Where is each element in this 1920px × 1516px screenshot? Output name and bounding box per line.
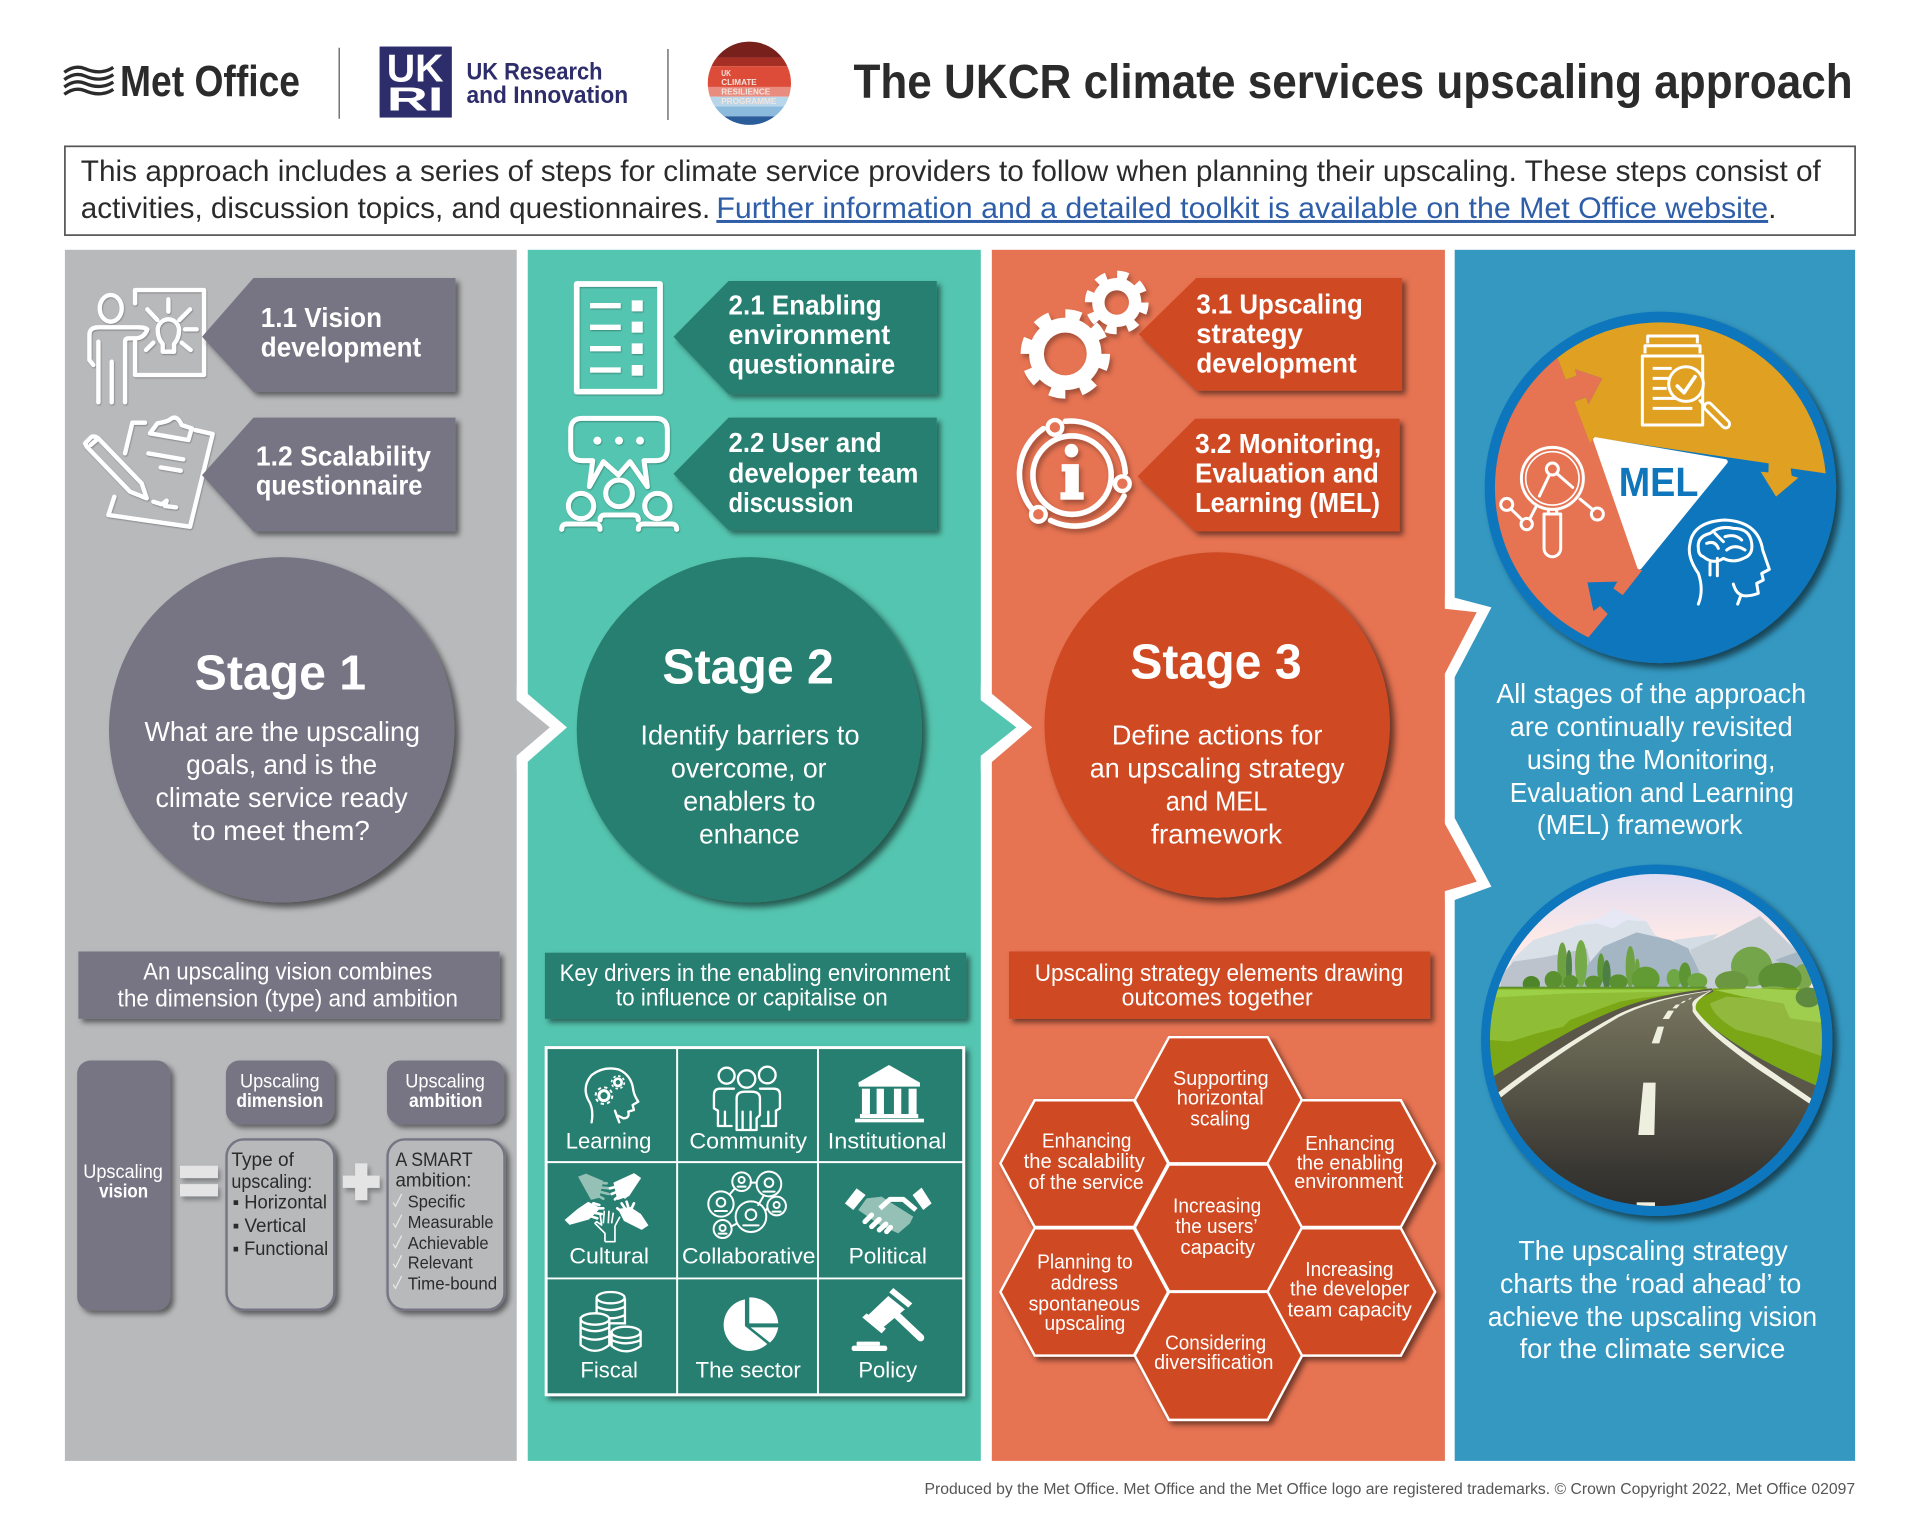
callout: 1.1: development bbox=[261, 331, 422, 362]
Stage 2 circle: enablers to bbox=[683, 786, 816, 817]
banner: strategy elements: Upscaling strategy elements drawing bbox=[1035, 960, 1403, 987]
callout: 1.2 bbox=[202, 418, 456, 531]
SMART ambition list: Measurable bbox=[408, 1212, 493, 1232]
hexagon cluster: upscaling bbox=[1044, 1313, 1125, 1335]
icon: information cycle bbox=[1019, 420, 1130, 526]
hexagon cluster: Supporting bbox=[1173, 1068, 1269, 1090]
callout: 3.1: development bbox=[1196, 347, 1357, 378]
icon: presenter with lightbulb bbox=[89, 290, 204, 402]
header: Met Office logo: Met Office bbox=[120, 58, 300, 106]
hexagon cluster: team capacity bbox=[1288, 1299, 1413, 1321]
label: Learning: Learning bbox=[566, 1129, 651, 1154]
Stage 3 circle: and MEL bbox=[1166, 786, 1267, 817]
SMART ambition list: Specific bbox=[408, 1191, 466, 1211]
MEL description text: using the Monitoring, bbox=[1527, 744, 1776, 775]
MEL description text: Evaluation and Learning bbox=[1510, 777, 1794, 808]
hexagon cluster: the enabling bbox=[1297, 1152, 1403, 1174]
header: Climate Resilience Programme logo: CLIMATE bbox=[721, 78, 757, 87]
intro text box: This approach includes a series of steps for climate service providers to follow when planning their upscaling. These steps consist of bbox=[81, 155, 1821, 188]
footer credit: Produced by the Met Office. Met Office and the Met Office logo are registered trademarks. © Crown Copyright 2022, Met Office 02097 bbox=[924, 1481, 1855, 1498]
callout: 2.1: environment bbox=[729, 319, 891, 350]
header: Climate Resilience Programme logo: RESILIENCE bbox=[721, 87, 770, 96]
Stage 2 circle bbox=[577, 557, 922, 902]
callout: 1.2: questionnaire bbox=[256, 470, 422, 501]
callout: 3.1: strategy bbox=[1196, 318, 1303, 349]
panel: Stage 3 column bbox=[992, 250, 1491, 1461]
road description text: for the climate service bbox=[1520, 1333, 1785, 1364]
callout: 2.1: 2.1 Enabling bbox=[729, 290, 882, 321]
banner: upscaling vision bbox=[78, 951, 500, 1019]
banner: strategy elements: outcomes together bbox=[1122, 984, 1313, 1011]
callout: 1.1 bbox=[202, 278, 456, 392]
callout: 3.1: 3.1 Upscaling bbox=[1196, 288, 1363, 319]
hexagon cluster: Considering bbox=[1165, 1332, 1266, 1354]
banner: key drivers: Key drivers in the enabling environment bbox=[560, 960, 951, 987]
icon: gears bbox=[1026, 275, 1144, 393]
header: UKRI logo: and Innovation bbox=[467, 82, 628, 109]
icon: document and magnifier bbox=[1642, 336, 1726, 425]
label: Policy: Policy bbox=[858, 1358, 917, 1383]
hexagon cluster: Enhancing bbox=[1042, 1130, 1131, 1152]
icon: gavel bbox=[852, 1288, 921, 1351]
upscaling dimension header: dimension bbox=[236, 1091, 323, 1112]
icon: pie chart bbox=[724, 1297, 778, 1351]
callout: 3.2: Learning (MEL) bbox=[1195, 487, 1380, 518]
drivers grid bbox=[546, 1047, 964, 1395]
hexagon cluster: capacity bbox=[1180, 1237, 1256, 1259]
hexagon cluster bbox=[1000, 1037, 1435, 1420]
hexagon cluster: of the service bbox=[1029, 1172, 1144, 1194]
upscaling vision box: vision bbox=[99, 1182, 148, 1203]
panel: MEL column bbox=[1455, 250, 1855, 1461]
icon: analysis magnifier bbox=[1501, 447, 1603, 557]
header: UKRI logo bbox=[380, 47, 628, 119]
orange MEL sector bbox=[1495, 358, 1642, 637]
title: The UKCR climate services upscaling approach bbox=[853, 56, 1853, 109]
icon: institutional bbox=[855, 1065, 924, 1122]
label: Cultural: Cultural bbox=[569, 1244, 649, 1269]
callout: 2.2: developer team bbox=[729, 457, 918, 488]
callout: 3.2: Evaluation and bbox=[1195, 457, 1379, 488]
label: Political: Political bbox=[849, 1244, 927, 1269]
icon: collaborative network bbox=[708, 1172, 786, 1238]
Stage 2 circle: enhance bbox=[699, 819, 800, 850]
road surface bbox=[1490, 988, 1827, 1210]
upscaling dimension list: upscaling: bbox=[231, 1172, 312, 1193]
icon: learning bbox=[586, 1068, 638, 1122]
upscaling dimension list: ▪ Vertical bbox=[233, 1216, 306, 1237]
callout: 3.2: 3.2 Monitoring, bbox=[1195, 428, 1381, 459]
hexagon cluster: address bbox=[1051, 1272, 1118, 1294]
header: UKRI logo: UK bbox=[387, 48, 444, 91]
upscaling ambition header: Upscaling bbox=[405, 1071, 485, 1092]
Stage 1 circle: climate service ready bbox=[156, 782, 409, 813]
MEL label: MEL bbox=[1619, 459, 1698, 505]
hexagon cluster: the scalability bbox=[1024, 1151, 1146, 1173]
hexagon cluster: the users’ bbox=[1176, 1216, 1258, 1238]
header: Met Office logo bbox=[64, 58, 300, 106]
SMART ambition list: Relevant bbox=[408, 1253, 473, 1273]
MEL cycle circle bbox=[1485, 312, 1836, 663]
callout: 1.2: 1.2 Scalability bbox=[256, 440, 431, 471]
icon: brain head bbox=[1689, 520, 1769, 604]
road description text: achieve the upscaling vision bbox=[1488, 1301, 1817, 1332]
hexagon cluster: diversification bbox=[1154, 1352, 1273, 1374]
upscaling dimension list: ▪ Functional bbox=[233, 1239, 328, 1260]
callout: 2.1 bbox=[673, 281, 937, 394]
hexagon cluster: horizontal bbox=[1177, 1088, 1264, 1110]
hexagon cluster: Increasing bbox=[1305, 1259, 1393, 1281]
MEL triangle bbox=[1596, 440, 1725, 567]
header: UKRI logo: RI bbox=[387, 82, 444, 119]
callout: 2.1: questionnaire bbox=[729, 348, 895, 379]
Stage 2 circle: Stage 2 bbox=[662, 640, 834, 694]
header: Climate Resilience Programme logo bbox=[707, 40, 792, 126]
Stage 1 circle: goals, and is the bbox=[186, 749, 377, 780]
Stage 1 circle: What are the upscaling bbox=[144, 716, 420, 747]
road lines bbox=[1498, 990, 1710, 1097]
banner: upscaling vision: the dimension (type) and ambition bbox=[118, 986, 458, 1013]
intro text box: . bbox=[1768, 192, 1777, 225]
right field layers bbox=[1695, 988, 1827, 1090]
equals sign bbox=[180, 1166, 218, 1196]
callout: 1.1: 1.1 Vision bbox=[261, 302, 382, 333]
yellow MEL sector bbox=[1557, 322, 1826, 497]
hexagon cluster: Increasing bbox=[1173, 1195, 1261, 1217]
header: Climate Resilience Programme logo: UK bbox=[721, 69, 731, 78]
label: Fiscal: Fiscal bbox=[580, 1358, 638, 1383]
banner: key drivers bbox=[545, 953, 966, 1019]
icon: clipboard and pencil bbox=[85, 418, 213, 527]
icon: questionnaire list bbox=[577, 284, 660, 392]
hexagon cluster: Enhancing bbox=[1305, 1133, 1395, 1155]
road description text: The upscaling strategy bbox=[1518, 1235, 1789, 1266]
Stage 2 circle: Identify barriers to bbox=[640, 720, 860, 751]
upscaling vision box bbox=[77, 1060, 170, 1310]
callout: 3.1 bbox=[1139, 278, 1402, 391]
intro text box: Further information and a detailed toolkit is available on the Met Office website bbox=[716, 192, 1768, 225]
upscaling dimension list: ▪ Horizontal bbox=[233, 1193, 327, 1214]
callout: 3.2 bbox=[1138, 419, 1400, 531]
label: Community: Community bbox=[689, 1129, 807, 1154]
intro text box: activities, discussion topics, and questionnaires. bbox=[81, 192, 710, 225]
header: Climate Resilience Programme logo: PROGRAMME bbox=[721, 97, 776, 106]
Stage 2 circle: overcome, or bbox=[671, 753, 827, 784]
upscaling dimension list bbox=[227, 1139, 334, 1310]
SMART ambition list: A SMART bbox=[396, 1150, 473, 1171]
intro text box bbox=[65, 146, 1855, 235]
upscaling ambition header: ambition bbox=[409, 1091, 482, 1112]
callout: 2.2: 2.2 User and bbox=[729, 427, 882, 458]
Stage 3 circle: Stage 3 bbox=[1130, 635, 1302, 689]
hexagon cluster: scaling bbox=[1190, 1108, 1250, 1130]
upscaling ambition header bbox=[387, 1060, 504, 1124]
road description text bbox=[1488, 1235, 1817, 1364]
Stage 3 circle bbox=[1044, 552, 1390, 898]
plus sign bbox=[343, 1163, 380, 1200]
hexagon cluster: Planning to bbox=[1037, 1252, 1133, 1274]
header: UKRI logo: UK Research bbox=[467, 59, 602, 86]
Stage 1 circle bbox=[109, 557, 454, 902]
SMART ambition list: Achievable bbox=[408, 1233, 489, 1253]
upscaling dimension list: Type of bbox=[231, 1150, 295, 1171]
left field layers bbox=[1487, 988, 1710, 1080]
panel: Stage 2 column bbox=[528, 250, 1032, 1461]
label: Institutional: Institutional bbox=[828, 1129, 947, 1154]
upscaling vision box: Upscaling bbox=[83, 1162, 163, 1183]
icon: cultural hands bbox=[567, 1175, 647, 1242]
road illustration bbox=[1481, 865, 1832, 1216]
SMART ambition list bbox=[388, 1139, 504, 1310]
hexagon cluster: environment bbox=[1294, 1171, 1404, 1193]
SMART ambition list: ambition: bbox=[396, 1171, 471, 1192]
hexagon cluster: the developer bbox=[1290, 1279, 1410, 1301]
SMART ambition list: Time-bound bbox=[408, 1273, 497, 1293]
label: The sector: The sector bbox=[696, 1358, 801, 1383]
banner: upscaling vision: An upscaling vision combines bbox=[143, 959, 432, 986]
Stage 3 circle: Define actions for bbox=[1112, 720, 1322, 751]
hexagon cluster: spontaneous bbox=[1029, 1293, 1140, 1315]
banner: key drivers: to influence or capitalise on bbox=[616, 984, 888, 1011]
icon: community bbox=[714, 1067, 780, 1130]
MEL description text: (MEL) framework bbox=[1537, 809, 1743, 840]
Stage 3 circle: framework bbox=[1151, 819, 1283, 850]
icon: team discussion bbox=[562, 418, 677, 529]
banner: strategy elements bbox=[1009, 951, 1430, 1019]
label: Collaborative: Collaborative bbox=[682, 1244, 816, 1269]
Stage 3 circle: an upscaling strategy bbox=[1090, 753, 1345, 784]
MEL description text: are continually revisited bbox=[1510, 711, 1793, 742]
panel: Stage 1 column bbox=[65, 250, 567, 1461]
road description text: charts the ‘road ahead’ to bbox=[1500, 1268, 1801, 1299]
callout: 2.2 bbox=[673, 418, 937, 530]
callout: 2.2: discussion bbox=[729, 487, 853, 518]
Stage 1 circle: to meet them? bbox=[192, 815, 370, 846]
icon: handshake bbox=[845, 1188, 932, 1233]
MEL description text bbox=[1496, 678, 1806, 840]
upscaling dimension header: Upscaling bbox=[240, 1071, 320, 1092]
icon: coin stacks bbox=[581, 1292, 641, 1351]
Stage 1 circle: Stage 1 bbox=[195, 646, 366, 700]
MEL description text: All stages of the approach bbox=[1496, 678, 1806, 709]
upscaling dimension header bbox=[226, 1060, 334, 1124]
